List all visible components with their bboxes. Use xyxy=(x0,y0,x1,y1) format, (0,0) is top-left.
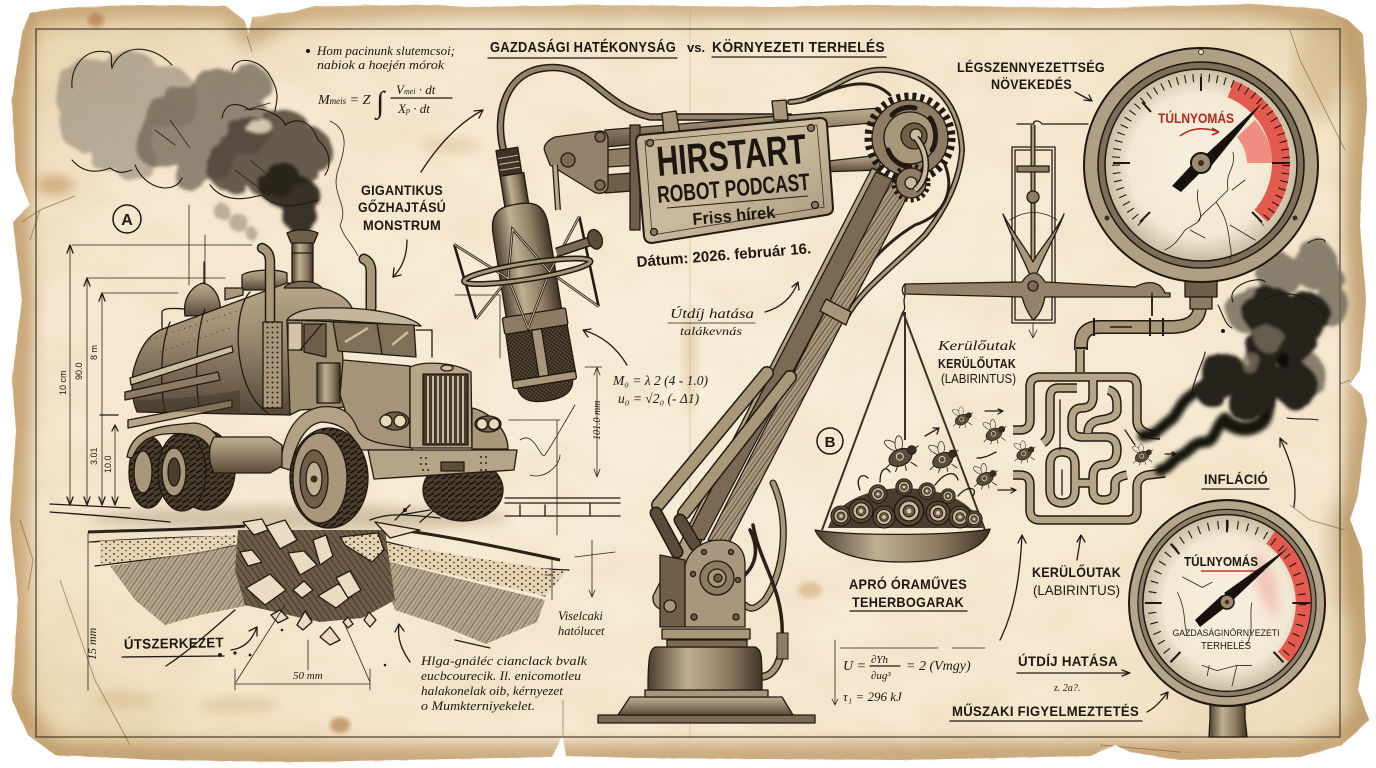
face cracks xyxy=(1165,152,1255,260)
gauge label: TÚLNYOMÁS xyxy=(1158,111,1234,126)
label: útdíj hatása xyxy=(1017,652,1130,694)
arm springs xyxy=(656,373,790,552)
label: kerülőutak lower xyxy=(1032,535,1121,598)
integral formula: ∫ xyxy=(374,86,386,121)
balance beam xyxy=(902,273,1170,320)
curved arrow to labyrinth xyxy=(1000,535,1026,640)
smoke body xyxy=(1196,241,1350,421)
dimension text: 90.0 xyxy=(74,362,84,380)
handwritten top note: Hom pacinunk slutemcsoi; xyxy=(316,44,455,58)
tanker steam truck xyxy=(125,230,517,528)
broken road cross-section xyxy=(88,505,569,690)
mic body xyxy=(489,200,562,319)
small gauge stem xyxy=(1209,700,1247,737)
label: apró óraműves teherbogarak: TEHERBOGARAK xyxy=(852,594,964,610)
dimension text: 3.01 xyxy=(89,447,99,465)
label: infláció: INFLÁCIÓ xyxy=(1204,470,1268,487)
plate subheading: ROBOT PODCAST xyxy=(656,169,811,209)
red underline xyxy=(1201,570,1256,572)
bumper xyxy=(368,450,517,479)
label: kerülőutak upper: Kerülőutak xyxy=(937,339,1017,354)
plate divider xyxy=(667,196,808,208)
small gauge dial xyxy=(1129,500,1325,706)
formula lower: ∂Yh xyxy=(871,654,889,666)
far front wheel xyxy=(423,459,503,521)
red arrow xyxy=(1180,128,1219,136)
label: kerülőutak upper xyxy=(937,339,1017,386)
arrow to truck xyxy=(393,240,407,277)
robot arm cables xyxy=(500,67,962,320)
far fender and headlights xyxy=(380,408,508,449)
label: műszaki figyelmeztetés xyxy=(950,692,1168,721)
handwritten road note: eucbcourecik. Il. enicomotleu xyxy=(421,669,581,683)
label: légszennyezettség növekedés: LÉGSZENNYEZETTSÉG xyxy=(957,60,1105,75)
label: gigantikus monstrum: MONSTRUM xyxy=(363,217,441,233)
left dimension lines xyxy=(58,205,252,505)
small gauge caption: GAZDASÁGINÖRNYEZETI xyxy=(1172,628,1280,638)
gear assembly xyxy=(868,96,952,200)
smokestack xyxy=(284,230,322,288)
shock mount xyxy=(453,213,616,337)
label: apró óraműves teherbogarak xyxy=(849,575,967,611)
smokestack cloud A xyxy=(56,49,358,256)
studio microphone xyxy=(441,136,627,411)
tank bands and pipes xyxy=(125,292,268,428)
red zone xyxy=(1231,89,1281,216)
small gauge caption: TERHELÉS xyxy=(1201,639,1251,652)
exhaust pipes xyxy=(262,248,371,408)
label: gigantikus monstrum: GIGANTIKUS xyxy=(361,182,443,198)
mic collar xyxy=(502,308,568,335)
label: kerülőutak lower: KERÜLŐUTAK xyxy=(1032,563,1121,580)
gauge bezel xyxy=(1084,48,1318,282)
upper arm beams xyxy=(605,100,882,230)
black smoke plume xyxy=(1143,239,1350,470)
label: kerülőutak lower: (LABIRINTUS) xyxy=(1033,582,1120,598)
handwritten road note: o Mumkterniyekelet. xyxy=(421,699,535,713)
fuel tank xyxy=(210,437,282,473)
label: infláció xyxy=(1202,438,1295,507)
label: útszerkezet: ÚTSZERKEZET xyxy=(124,633,224,652)
front fender xyxy=(280,407,412,470)
handwritten road note: Hlga-gnáléc cianclack bvalk xyxy=(420,654,588,668)
integral formula: Mmeis = Z xyxy=(317,93,371,108)
tick marks xyxy=(1113,77,1290,223)
dimension text: 10 cm xyxy=(58,370,68,395)
formula lower xyxy=(832,640,985,705)
plate heading: HIRSTART xyxy=(655,125,808,185)
smoke tails xyxy=(1143,380,1270,470)
label: kerülőutak upper: (LABIRINTUS) xyxy=(941,372,1016,386)
plate tagline: Friss hírek xyxy=(692,203,777,229)
circle marker B: B xyxy=(825,434,836,451)
label: gigantikus monstrum: GŐZHAJTÁSÚ xyxy=(358,198,446,215)
robot pedestal xyxy=(598,540,815,723)
handwritten note right of road: Viselcaki xyxy=(558,609,603,623)
balance scale frame xyxy=(1003,121,1088,338)
rock fragments xyxy=(240,519,420,645)
dimension: 15 mm: 15 mm xyxy=(85,627,99,660)
pipe labyrinth xyxy=(1013,350,1165,520)
scale pan xyxy=(815,529,990,562)
small gauge caption xyxy=(1172,628,1280,652)
label: légszennyezettség növekedés: NÖVEKEDÉS xyxy=(991,77,1072,92)
handwritten road note xyxy=(395,624,588,713)
rear tank domes xyxy=(162,262,287,330)
label: gigantikus monstrum xyxy=(358,182,446,233)
mic connector xyxy=(496,147,529,210)
label: útdíj hatása: z. 2a?. xyxy=(1053,683,1080,694)
dimension right of truck xyxy=(455,295,603,535)
lower hoses xyxy=(745,483,788,677)
main title: KÖRNYEZETI TERHELÉS xyxy=(712,39,885,56)
cab roof and windows xyxy=(287,308,432,357)
main title: vs. xyxy=(687,40,705,55)
triangular bracket xyxy=(544,131,608,210)
útdíj handwritten note xyxy=(668,282,799,338)
tank body xyxy=(132,283,352,415)
formula lower: U = xyxy=(843,659,866,674)
pressure gauge large xyxy=(1084,48,1318,309)
label: útszerkezet xyxy=(122,627,257,657)
dimension text: 10.0 xyxy=(103,455,113,473)
dimension: 50 mm xyxy=(235,605,370,690)
formula lower: τ₁ = 296 kJ xyxy=(843,689,903,704)
label: apró óraműves teherbogarak: APRÓ ÓRAMŰVES xyxy=(849,575,967,592)
mic grille xyxy=(505,325,579,406)
formula centre: M₀ = λ 2 (4 - 1.0) xyxy=(612,373,709,388)
main title: GAZDASÁGI HATÉKONYSÁG xyxy=(490,39,676,56)
label: légszennyezettség növekedés xyxy=(957,60,1105,101)
label: műszaki figyelmeztetés: MŰSZAKI FIGYELMEZTETÉS xyxy=(952,702,1139,719)
small gauge needle xyxy=(1195,547,1289,627)
pressure gauge small xyxy=(1129,500,1325,737)
pipe to gauge xyxy=(1076,297,1200,350)
formula lower: ∂ug³ xyxy=(871,670,891,682)
formula centre xyxy=(583,329,709,406)
útdíj handwritten note: talákevnás xyxy=(680,324,742,338)
front wheel xyxy=(290,428,368,528)
formula lower: = 2 (Vmgy) xyxy=(906,659,971,674)
gauge needle xyxy=(1172,102,1263,192)
label: útdíj hatása: ÚTDÍJ HATÁSA xyxy=(1018,652,1118,669)
arrow to microphone xyxy=(421,110,483,172)
date: Dátum: 2026. február 16. xyxy=(636,240,812,271)
handwritten top note xyxy=(306,44,455,72)
dimension text: 8 m xyxy=(89,345,99,360)
road surface behind truck xyxy=(50,498,620,560)
nameplate: Hirstart Robot Podcast xyxy=(636,118,833,243)
circle marker A xyxy=(113,205,141,233)
dimension text xyxy=(58,345,113,473)
cab body xyxy=(287,320,412,448)
circle marker B xyxy=(817,428,843,454)
scale chains xyxy=(822,312,985,530)
circle marker A: A xyxy=(121,212,133,229)
integral formula: Xp · dt xyxy=(397,101,430,116)
hood xyxy=(340,360,410,448)
integral formula xyxy=(317,82,452,121)
handwritten note right of road xyxy=(558,540,615,638)
clockwork bugs xyxy=(883,407,1176,493)
main title xyxy=(488,39,886,58)
dimension right of truck: 101.0 mm xyxy=(592,401,603,440)
gauge stem xyxy=(1185,277,1217,309)
handwritten top note: nabiok a hoején mórok xyxy=(317,58,444,72)
air cleaner cylinder xyxy=(317,363,340,403)
rear wheels xyxy=(127,423,235,511)
integral formula: Vmei · dt xyxy=(396,82,436,97)
handwritten note right of road: hatólucet xyxy=(558,624,605,638)
handwritten road note: halakonelak oib, kérnyezet xyxy=(421,684,564,698)
label: kerülőutak upper: KERÜLŐUTAK xyxy=(938,356,1016,371)
dimension: 50 mm: 50 mm xyxy=(293,670,323,682)
small gauge overpressure label: TÚLNYOMÁS xyxy=(1184,554,1258,569)
grille xyxy=(410,363,472,448)
main arm rails xyxy=(653,168,908,612)
formula centre: u₀ = √2₀ (- Δ1) xyxy=(618,391,700,406)
útdíj handwritten note: Útdíj hatása xyxy=(670,305,754,322)
clockwork pile on pan xyxy=(828,469,983,528)
